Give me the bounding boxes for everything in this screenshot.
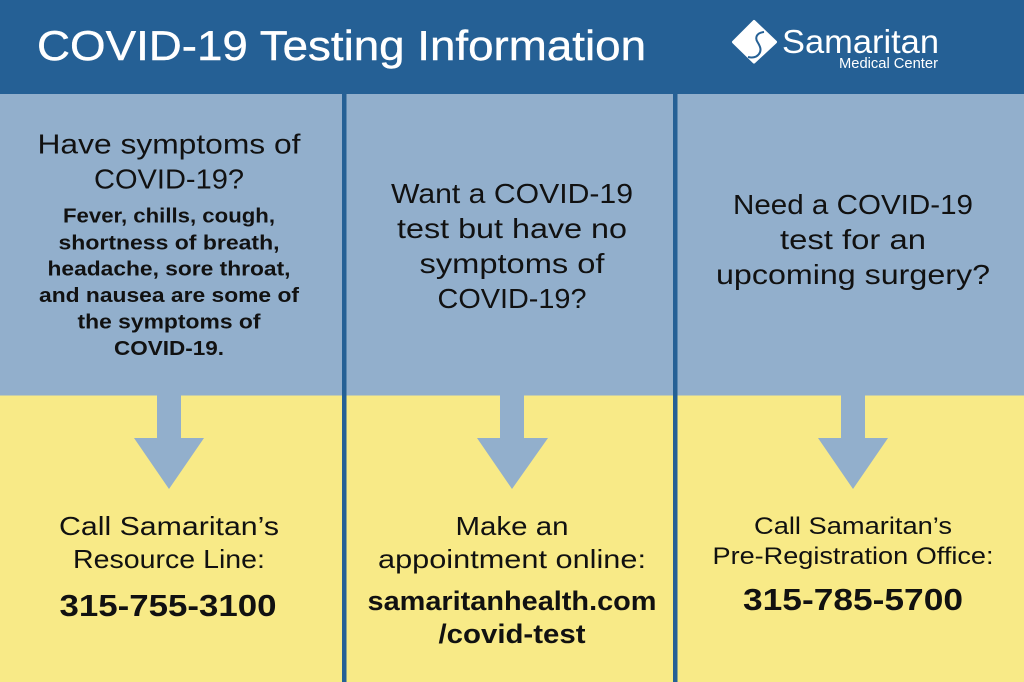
- symptoms text: COVID-19.: [114, 337, 224, 360]
- icon: Samaritan diamond: [734, 22, 776, 62]
- column 2 question: symptoms of: [420, 248, 605, 279]
- symptoms text: [39, 204, 299, 360]
- column 2 action: appointment online:: [378, 544, 646, 574]
- arrow 2: [477, 395, 548, 489]
- column divider left: [342, 94, 346, 682]
- arrow 3: [818, 395, 888, 489]
- column 3 question: test for an: [780, 224, 926, 255]
- arrow 1: [134, 395, 204, 489]
- column 3 action: [712, 513, 994, 617]
- column 1 question: COVID-19?: [94, 164, 244, 194]
- panel: action background: [0, 396, 1024, 682]
- column 1 action: [59, 511, 279, 623]
- column divider right: [673, 94, 678, 682]
- column 3 action: Pre-Registration Office:: [712, 543, 994, 570]
- logo wordmark: Samaritan: [782, 23, 939, 60]
- phone number: 315-755-3100: [60, 588, 276, 623]
- column 2 action: Make an: [456, 511, 568, 541]
- title: COVID-19 Testing Information: [37, 22, 646, 69]
- column 2 action: /covid-test: [438, 619, 586, 649]
- symptoms text: Fever, chills, cough,: [63, 204, 275, 228]
- column 1 action: Call Samaritan’s: [59, 511, 279, 541]
- column 1 action: Resource Line:: [73, 544, 265, 574]
- logo subtitle: Medical Center: [839, 55, 938, 72]
- panel: question background: [0, 94, 1024, 396]
- phone number: 315-785-5700: [743, 582, 963, 617]
- symptoms text: headache, sore throat,: [48, 258, 290, 280]
- header band: [0, 0, 1024, 94]
- column 2 question: test but have no: [397, 213, 627, 244]
- column 3 question: upcoming surgery?: [716, 259, 990, 290]
- column 3 question: [716, 189, 990, 290]
- symptoms text: the symptoms of: [78, 310, 261, 334]
- column 2 action: [368, 511, 656, 649]
- symptoms text: shortness of breath,: [58, 232, 280, 254]
- column 3 action: Call Samaritan’s: [754, 513, 952, 540]
- symptoms text: and nausea are some of: [39, 284, 299, 307]
- column 2 question: COVID-19?: [438, 283, 586, 314]
- logo: [734, 22, 939, 72]
- column 3 question: Need a COVID-19: [733, 189, 973, 220]
- web address: samaritanhealth.com: [368, 586, 656, 616]
- heading: Have symptoms of: [38, 128, 301, 160]
- column 2 question: [391, 178, 633, 314]
- column 2 question: Want a COVID-19: [391, 178, 633, 209]
- column 1 question: [38, 128, 301, 360]
